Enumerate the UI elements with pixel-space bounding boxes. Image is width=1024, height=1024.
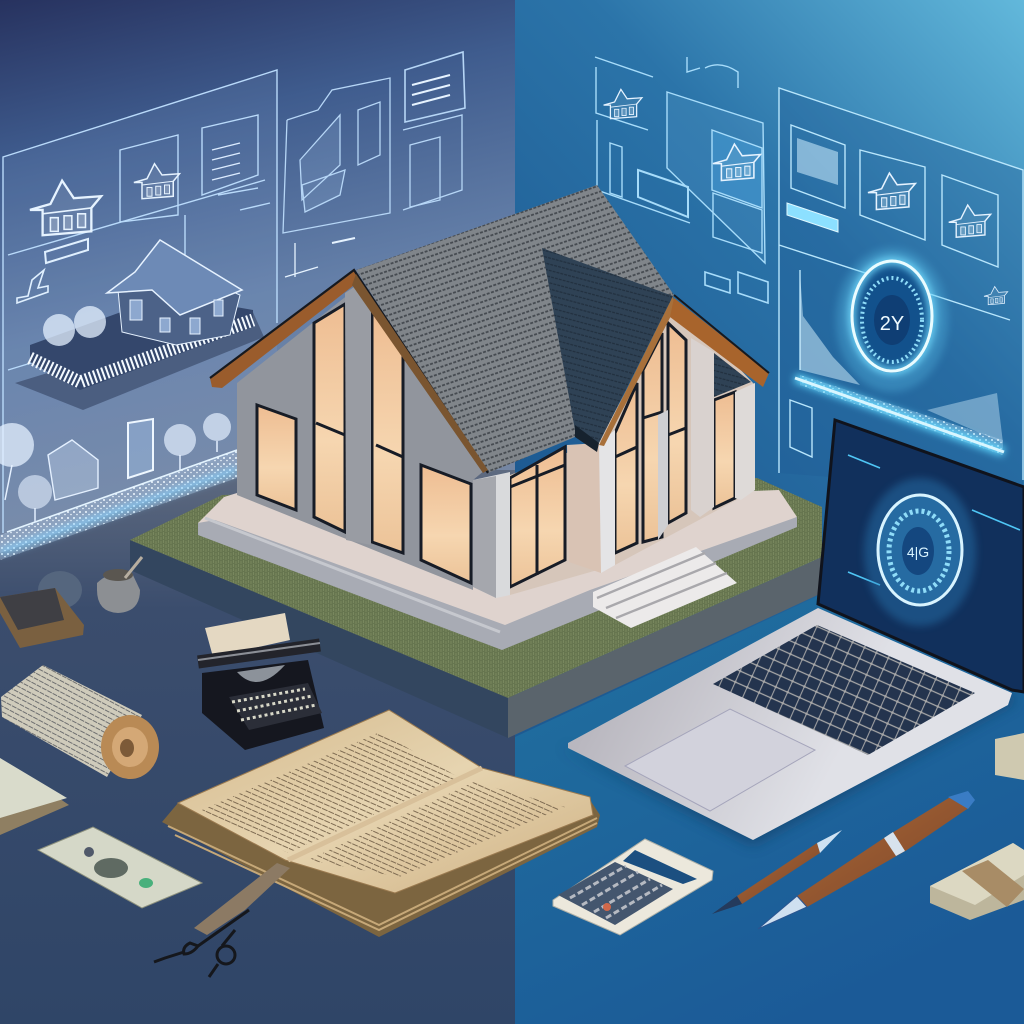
icon: fountain pen: [758, 791, 975, 929]
pillars: [345, 287, 755, 598]
gable eave shadow: [575, 425, 599, 452]
icon: old open book: [162, 710, 600, 937]
icon: small pen: [712, 830, 842, 914]
panel: right hologram with glowing dial: [779, 88, 1023, 492]
side roof: [714, 353, 751, 397]
icon: small house sketch: [604, 89, 642, 119]
laptop screen: [818, 420, 1024, 692]
laptop keyboard: [713, 625, 975, 755]
trackpad: [625, 709, 815, 811]
icon: glowing dial: [836, 248, 948, 392]
windows: [257, 304, 735, 587]
icon: house sketch right 1: [868, 173, 915, 210]
terrace: [198, 490, 797, 650]
main roof: [356, 185, 674, 473]
gable roof: [542, 248, 673, 443]
icon: scissors: [154, 910, 249, 977]
base soil: [130, 540, 822, 738]
panel: upper floating blueprint: [283, 52, 465, 277]
icon: wooden box and tin: [0, 557, 142, 648]
right facade: [510, 300, 755, 595]
icon: small wire house: [984, 287, 1008, 305]
panel: top right hologram: [595, 57, 768, 303]
icon: preview tile: [797, 138, 838, 185]
icon: paper scroll: [1, 665, 159, 779]
icon: dollar bill: [38, 827, 202, 908]
icon: typewriter: [198, 613, 324, 750]
icon: blue house sketch: [713, 144, 760, 180]
laptop base: [568, 608, 1012, 840]
icon: lower row sketches: [0, 413, 231, 522]
grass lawn: [130, 478, 822, 698]
search bar: [787, 203, 838, 232]
chart: glowing area graph: [795, 273, 1004, 455]
icon: small sketch: [17, 270, 48, 303]
house on grass base: [130, 185, 822, 738]
value: 2Y: [880, 313, 904, 335]
icon: screen dial: [864, 478, 976, 626]
glowing floor band: [0, 450, 237, 560]
left facade: [237, 290, 485, 590]
icon: calculator: [553, 839, 713, 935]
icon: house sketch right 2: [949, 205, 991, 237]
icon: 3D house model: [15, 240, 264, 410]
laptop: [560, 420, 1024, 845]
panel: left hologram wall: [0, 70, 277, 560]
icon: stacked cash left: [0, 758, 69, 835]
laptop shadow: [560, 690, 1018, 845]
icon: money stacks right: [930, 733, 1024, 920]
front stairs: [593, 547, 737, 628]
value: 4|G: [907, 544, 929, 560]
icon: form bar: [45, 239, 88, 263]
icon: house sketch 1: [30, 181, 101, 235]
wood fascia: [210, 270, 769, 473]
icon: house sketch 2: [134, 164, 180, 199]
